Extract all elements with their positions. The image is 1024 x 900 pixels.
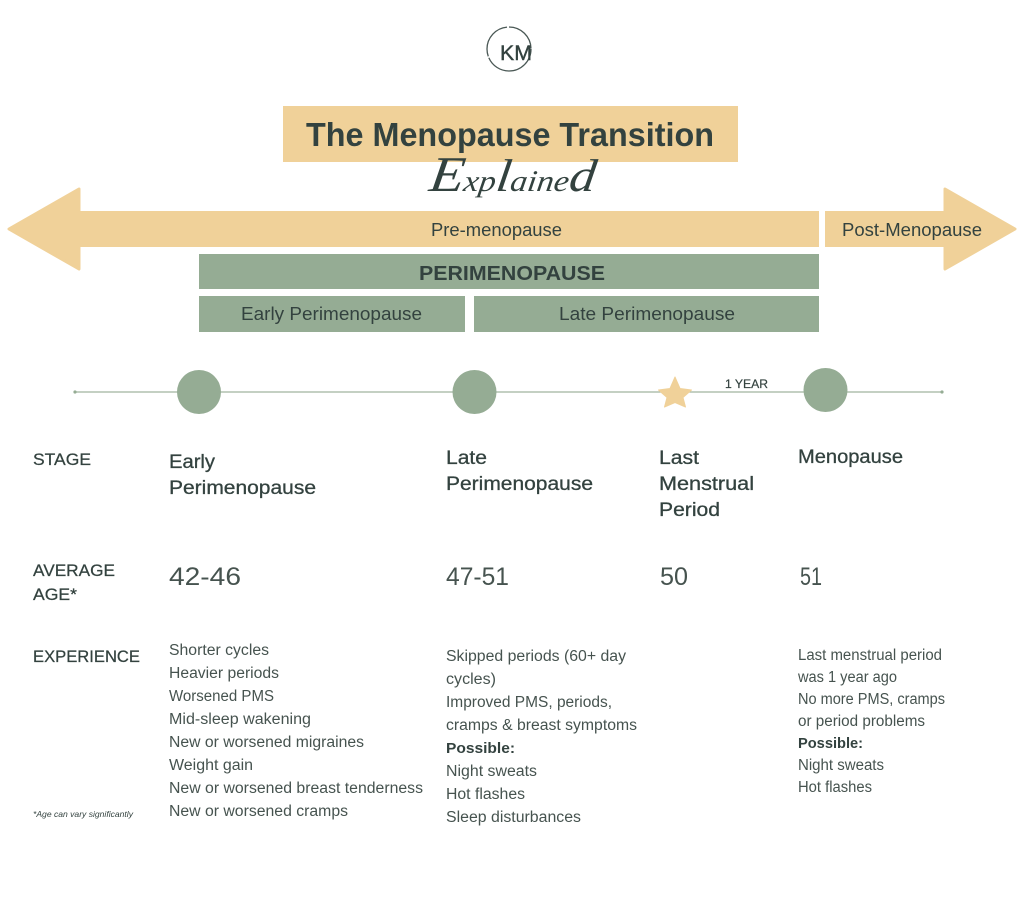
- experience list: menopause: or period problems: [798, 713, 925, 730]
- logo: KM circle: [487, 27, 532, 71]
- experience list: late perimenopause: cramps & breast symptoms: [446, 717, 637, 734]
- bar: late perimenopause: Late Perimenopause: [559, 304, 735, 324]
- experience list: late perimenopause: Improved PMS, periods,: [446, 694, 612, 711]
- experience list: early perimenopause: Shorter cycles: [169, 642, 269, 659]
- logo: KM circle: KM: [500, 42, 532, 65]
- experience list: late perimenopause: Hot flashes: [446, 786, 525, 803]
- experience list: early perimenopause: Heavier periods: [169, 665, 279, 682]
- experience list: late perimenopause: Skipped periods (60+ day: [446, 648, 626, 665]
- stage: early perimenopause: Early: [169, 452, 216, 473]
- stage: last menstrual period: Period: [659, 500, 720, 521]
- arrow: pre-menopause: Pre-menopause: [431, 220, 562, 240]
- experience list: late perimenopause: Sleep disturbances: [446, 809, 581, 826]
- stage: last menstrual period: [659, 448, 754, 521]
- row label: average age: AVERAGE: [33, 561, 115, 580]
- experience list: late perimenopause: [446, 648, 637, 826]
- experience list: late perimenopause: Possible:: [446, 740, 515, 757]
- experience list: early perimenopause: Weight gain: [169, 757, 253, 774]
- marker: early perimenopause: [177, 370, 221, 414]
- stage: late perimenopause: [446, 448, 593, 495]
- bar: perimenopause: [199, 254, 819, 289]
- experience list: menopause: was 1 year ago: [797, 669, 897, 686]
- experience list: menopause: Last menstrual period: [798, 647, 942, 664]
- experience list: menopause: Hot flashes: [798, 779, 872, 796]
- subtitle: Explained: Explained: [425, 146, 601, 202]
- row label: experience: EXPERIENCE: [33, 647, 140, 666]
- stage: early perimenopause: Perimenopause: [169, 478, 316, 499]
- experience list: early perimenopause: Worsened PMS: [169, 688, 274, 705]
- age: menopause: 51: [800, 563, 822, 591]
- experience list: late perimenopause: cycles): [446, 671, 496, 688]
- bar: early perimenopause: Early Perimenopause: [241, 304, 422, 324]
- experience list: late perimenopause: Night sweats: [446, 763, 537, 780]
- bar: perimenopause: PERIMENOPAUSE: [419, 263, 605, 285]
- stage: last menstrual period: Last: [659, 448, 700, 469]
- title banner: The Menopause Transition: [306, 116, 714, 153]
- experience list: early perimenopause: Mid-sleep wakening: [169, 711, 311, 728]
- experience list: early perimenopause: New or worsened cramps: [169, 803, 348, 820]
- marker: last menstrual period star: [658, 377, 692, 407]
- stage: late perimenopause: Perimenopause: [446, 474, 593, 495]
- bar: late perimenopause: [474, 296, 819, 332]
- label: 1 year: 1 YEAR: [725, 377, 768, 391]
- arrow: post-menopause: Post-Menopause: [842, 220, 982, 240]
- experience list: menopause: No more PMS, cramps: [798, 691, 945, 708]
- arrow: post-menopause: [825, 189, 1015, 269]
- age: early: 42-46: [169, 563, 241, 591]
- experience list: menopause: Night sweats: [798, 757, 884, 774]
- row label: stage: STAGE: [33, 450, 91, 469]
- experience list: menopause: [797, 647, 945, 796]
- stage: last menstrual period: Menstrual: [659, 474, 754, 495]
- age: late: 47-51: [446, 563, 509, 591]
- experience list: menopause: Possible:: [798, 735, 863, 752]
- bar: early perimenopause: [199, 296, 465, 332]
- stage: menopause: Menopause: [798, 447, 903, 468]
- experience list: early perimenopause: New or worsened migraines: [169, 734, 364, 751]
- stage: early perimenopause: [169, 452, 316, 499]
- age: last period: 50: [660, 563, 688, 591]
- title banner: [283, 106, 738, 162]
- arrow: pre-menopause: [9, 189, 819, 269]
- timeline: [73, 368, 944, 414]
- footnote: *Age can vary significantly: [33, 809, 134, 819]
- experience list: early perimenopause: New or worsened breast tenderness: [169, 780, 423, 797]
- marker: menopause: [804, 368, 848, 412]
- experience list: early perimenopause: [169, 642, 423, 820]
- stage: late perimenopause: Late: [446, 448, 487, 469]
- row label: average age: AGE*: [33, 585, 77, 604]
- marker: late perimenopause: [452, 370, 496, 414]
- row label: average age: [33, 561, 115, 604]
